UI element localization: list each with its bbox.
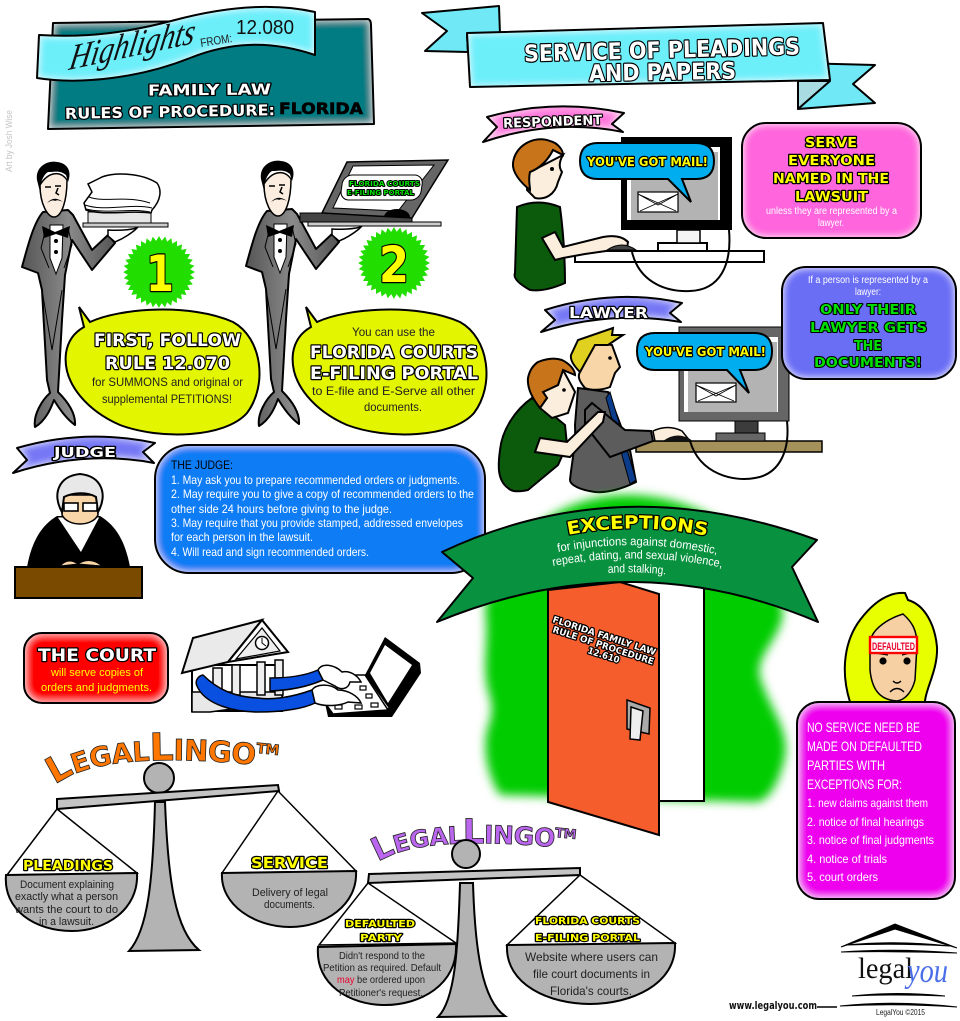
panel: defaulted parties list: PARTIES WITH [807,757,885,773]
monitor [621,137,732,230]
left pan: pleadings: Document explaining [20,879,114,891]
subtitle line one: FAMILY LAW [148,80,272,100]
panel: defaulted parties list: 5. court orders [807,870,878,884]
left pan: pleadings: in a lawsuit. [39,916,94,928]
lawyer suit [570,388,636,492]
panel: exceptions door [436,486,819,836]
right pan: service: documents. [264,899,315,911]
green ribbon [437,507,818,622]
subtitle line two: RULES OF PROCEDURE: [65,101,275,123]
speech bubble [580,143,714,202]
stand [129,802,199,951]
panel: the court: THE COURT [38,646,156,666]
panel: highlights title [37,7,374,129]
speech bubble one: for SUMMONS and original or [92,375,243,389]
scale two [318,840,675,1017]
panel: only their lawyer: If a person is represented by a [808,275,928,286]
panel: the judge list: 1. May ask you to prepare recommended orders or judgments. [171,473,460,487]
left pan: defaulted party: DEFAULTED [345,919,415,930]
logo: LegalYou [840,924,957,1017]
number 1 starburst [123,224,207,313]
left pan: defaulted party: may be ordered upon [337,974,425,986]
exceptions description line three: and stalking. [608,564,666,576]
left pan: pleadings: exactly what a person [15,891,118,903]
panel: serve everyone [742,123,921,238]
lawyer and client at computer [499,327,822,492]
speech bubble one [66,307,259,434]
right pan: service: Delivery of legal [252,887,328,899]
scale one [6,763,356,951]
rule number: 12.080 [236,17,294,39]
right pan: e-filing portal: Florida's courts. [550,984,632,998]
right pan: e-filing portal: FLORIDA COURTS [535,916,640,927]
panel: serve everyone: EVERYONE [788,154,875,169]
envelope [696,383,736,402]
green glow [485,495,786,802]
door handle [627,700,650,740]
hands [318,665,361,689]
lawyer ribbon: LAWYER [569,304,649,322]
speech bubble one: RULE 12.070 [105,354,230,374]
lawyer ribbon [541,297,682,332]
client head [540,370,575,418]
panel: defaulted parties list [797,702,955,899]
credit: art by Josh Wise: Art by Josh Wise [4,110,14,172]
panel: the court: will serve copies of [50,667,144,679]
head [527,155,563,198]
left pan: pleadings: PLEADINGS [23,859,113,874]
lawyer head [579,343,620,390]
highlights script heading: Highlights [66,11,199,78]
speech bubble two: FLORIDA COURTS [310,343,478,363]
speech bubble two: E-FILING PORTAL [310,364,478,384]
judge ribbon [13,437,155,473]
panel: defaulted parties list: NO SERVICE NEED BE [807,719,920,735]
legal lingo heading purple: LEGALLINGO [370,818,554,861]
lawyer hand [653,428,690,441]
panel: the court: orders and judgments. [41,682,152,694]
speech bubble two: documents. [364,400,422,414]
legal lingo heading orange: LEGALLINGO [44,732,256,784]
speech bubble two: to E-file and E-Serve all other [312,384,475,398]
panel: only their lawyer: DOCUMENTS! [814,356,922,371]
panel: the judge list: for each person in the lawsuit. [171,530,313,544]
right pan: e-filing portal [507,875,675,1004]
speech bubble two: You can use the [352,325,435,339]
panel: only their lawyer: LAWYER GETS [810,321,927,336]
panel: the judge list: other side 24 hours before giving to the judge. [171,502,392,516]
speech bubble [637,333,772,393]
left pan: defaulted party: Petition as required. Default [323,962,441,974]
door sign: RULE OF PROCEDURE [551,625,655,668]
desk [636,441,822,452]
panel: only their lawyer: ONLY THEIR [820,303,916,318]
speech bubble one: FIRST, FOLLOW [94,331,241,351]
respondent ribbon: RESPONDENT [503,113,602,132]
stand [438,883,505,1017]
panel: serve everyone: SERVE [805,136,857,151]
logo: LegalYou: you [904,953,948,990]
laptop [325,663,421,717]
speech bubble: YOU'VE GOT MAIL! [586,155,708,169]
banner heading line two: AND PAPERS [589,59,736,87]
headband [870,637,917,653]
panel: defaulted parties list: 3. notice of final judgments [807,833,934,847]
envelope [638,192,678,212]
logo: LegalYou: legal [858,952,913,985]
left pan: pleadings: wants the court to do [14,904,118,916]
panel: only their lawyer: lawyer: [855,287,881,298]
rule reference: FROM: [199,31,233,50]
client arm [535,412,605,457]
laptop on tray [300,160,448,226]
left pan: defaulted party: PARTY [360,933,403,944]
number 2 starburst [358,215,442,304]
left pan: defaulted party: Didn't respond to the [339,950,425,962]
panel: serve everyone: unless they are represented by a [766,206,897,217]
right pan: service: SERVICE [251,854,328,872]
right pan: e-filing portal: file court documents in [533,967,650,981]
speech bubble one: supplemental PETITIONS! [102,392,232,406]
waiter two with laptop [246,161,361,426]
panel: defaulted parties list: 4. notice of trials [807,852,887,866]
laptop on tray: E-FILING PORTAL [347,189,415,197]
legal lingo heading orange: TM [256,742,280,756]
icon: courthouse with hands on laptop [182,620,421,717]
number 2 starburst: 2 [379,236,409,294]
panel: service of pleadings banner [422,6,875,109]
speech bubble two [293,307,486,434]
panel: the judge list: 3. May require that you provide stamped, addressed envelopes [171,516,463,530]
judge figure [15,474,142,598]
logo: LegalYou: LegalYou ©2015 [876,1008,925,1017]
left pan: defaulted party [318,883,456,1005]
left pan: defaulted party: Petitioner's request. [339,987,423,999]
left pan: pleadings [6,809,137,931]
client shirt [499,398,567,491]
exceptions description line two: repeat, dating, and sexual violence, [552,550,722,569]
exceptions heading: EXCEPTIONS [566,514,708,536]
monitor [679,327,789,421]
white opening [620,575,704,801]
legal lingo heading purple: TM [555,827,576,840]
door sign: FLORIDA FAMILY LAW [551,615,657,658]
arm [542,232,628,260]
defaulted woman: DEFAULTED [872,641,915,653]
door [548,582,659,835]
waiter one with papers [22,162,137,427]
banner heading: SERVICE OF PLEADINGS [524,34,800,68]
panel: only their lawyer [782,267,956,379]
door sign: 12.610 [586,646,621,666]
respondent ribbon [483,106,624,142]
panel: the judge list: 2. May require you to give a copy of recommended orders to the [171,487,474,501]
right pan: e-filing portal: E-FILING PORTAL [535,933,641,944]
shirt [515,202,565,290]
panel: the judge list: THE JUDGE: [171,458,233,472]
laptop on tray: FLORIDA COURTS [349,180,420,188]
number 1 starburst: 1 [146,245,174,303]
panel: the court [24,633,168,703]
panel: the judge list [155,445,485,573]
subtitle Florida: FLORIDA [279,99,364,118]
panel: serve everyone: NAMED IN THE [773,172,889,187]
panel: the judge list: 4. Will read and sign recommended orders. [171,545,369,559]
exceptions description line one: for injunctions against domestic, [557,537,716,556]
bench [15,567,142,598]
panel: defaulted parties list: EXCEPTIONS FOR: [807,776,902,792]
speech bubble: YOU'VE GOT MAIL! [644,345,766,359]
arms [270,670,323,691]
panel: serve everyone: LAWSUIT [795,190,868,205]
tray with paper stack [83,174,168,227]
right pan: service [222,791,356,927]
defaulted woman [845,593,937,702]
panel: defaulted parties list: 2. notice of final hearings [807,815,924,829]
website address: www.legalyou.com [729,999,817,1012]
respondent at computer [513,137,764,291]
panel: defaulted parties list: 1. new claims against them [807,796,928,810]
panel: only their lawyer: THE [854,339,882,354]
panel: defaulted parties list: MADE ON DEFAULTED [807,738,922,754]
right pan: e-filing portal: Website where users can [525,950,658,964]
judge ribbon: JUDGE [53,446,116,461]
panel: serve everyone: lawyer. [818,218,844,229]
desk and cable [575,251,764,262]
